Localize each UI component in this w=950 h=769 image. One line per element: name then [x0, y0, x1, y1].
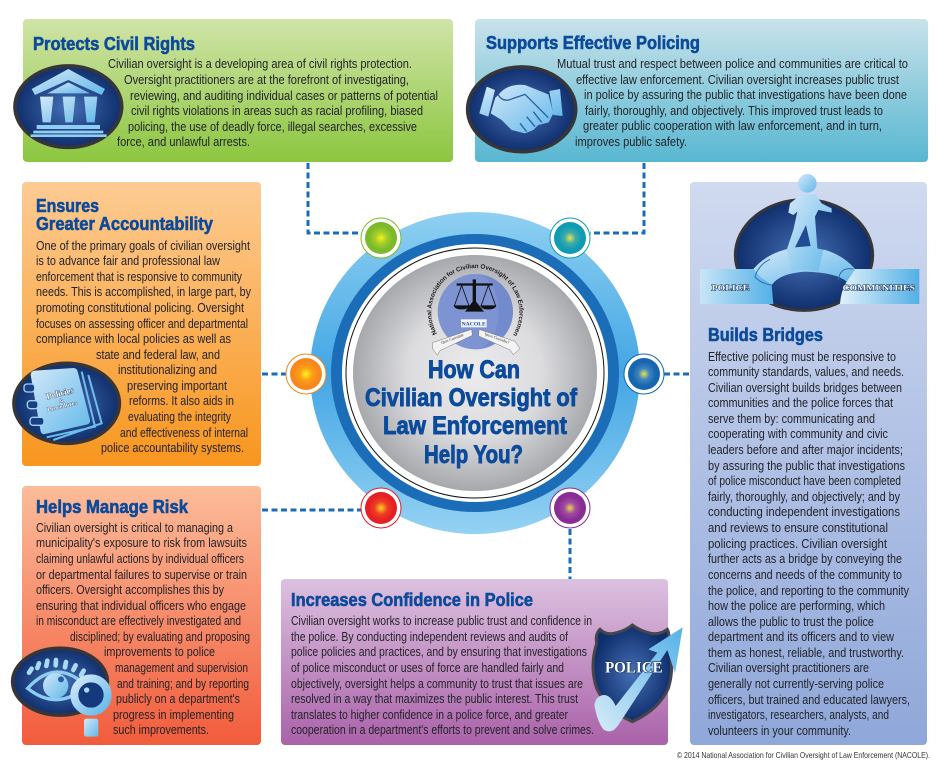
icon: policies and procedures notebook [14, 363, 119, 443]
heading: Increases Confidence in Police: Increases Confidence in Police [291, 589, 533, 610]
text block: accountability: enforcement that is responsive to community [36, 269, 242, 284]
text block: bridges: volunteers in your community. [708, 723, 851, 738]
heading: Supports Effective Policing: Supports Effective Policing [486, 32, 700, 53]
text block: accountability: evaluating the integrity [128, 409, 231, 424]
icon: policies and procedures notebook: & [59, 398, 65, 405]
icon: handshake [468, 67, 576, 152]
text block: effective policing: fairly, thoroughly, and objectively. This improved trust leads to [585, 103, 883, 118]
text block: manage risk: claiming unlawful actions by individual officers [36, 551, 244, 566]
text block: manage risk: disciplined; by evaluating and proposing [70, 629, 250, 644]
hub question text: Civilian Oversight of [365, 384, 578, 412]
connector: orange panel to hub [262, 372, 287, 376]
NACOLE logo: Ipsos Custodes? [484, 331, 510, 345]
panel: Ensures Greater Accountability [22, 182, 261, 466]
text block: confidence: translates to higher confidence in a police force, and greater [291, 707, 569, 722]
node: teal [550, 218, 590, 258]
text block: accountability: preserving important [127, 378, 227, 393]
node: orange [286, 354, 326, 394]
NACOLE logo [426, 264, 524, 356]
node: purple [550, 488, 590, 528]
text block: bridges: Civilian oversight builds bridges between [708, 380, 902, 395]
icon: person crossing puzzle bridge: COMMUNITIES [843, 283, 916, 292]
text block: civil rights: policing, the use of deadly force, illegal searches, excessive [128, 119, 417, 134]
panel: Helps Manage Risk [22, 486, 261, 745]
node: red [361, 488, 401, 528]
text block: bridges: investigators, researchers, analysts, and [708, 707, 889, 722]
text block: accountability: reforms. It also aids in [129, 393, 234, 408]
hub question text: Help You? [424, 441, 523, 469]
text block: bridges: of police misconduct have been completed [708, 473, 901, 488]
text block: accountability: focuses on assessing officer and departmental [36, 316, 248, 331]
text block: effective policing [557, 56, 908, 149]
text block: manage risk: management and supervision [115, 660, 248, 675]
connector: green panel to hub [308, 163, 362, 233]
panel: Increases Confidence in Police [281, 579, 668, 745]
connector: bridges panel to hub [664, 372, 690, 376]
text block: bridges: officers, but trained and educated lawyers, [708, 692, 910, 707]
icon: police shield and check mark [593, 625, 683, 731]
text block: confidence: objectively, oversight helps a community to trust that issues are [291, 676, 583, 691]
icon: policies and procedures notebook: Policies [45, 385, 75, 401]
panel: Supports Effective Policing [475, 19, 928, 162]
NACOLE logo: National Association for Civilian Oversight of Law Enforcement [426, 264, 524, 336]
hub question text: Law Enforcement [383, 412, 568, 440]
node: blue [624, 354, 664, 394]
hub question text: How Can [428, 356, 520, 384]
hub question text [365, 356, 578, 469]
text block: manage risk: municipality's exposure to risk from lawsuits [36, 535, 247, 550]
text block: civil rights: civil rights violations in areas such as racial profiling, biased [131, 103, 423, 118]
icon: police shield and check mark: POLICE [605, 659, 663, 676]
text block: confidence: police policies and practices, and by ensuring that investigations [291, 644, 587, 659]
text block: confidence: the police. By conducting independent reviews and audits of [291, 629, 568, 644]
text block: civil rights: force, and unlawful arrests. [117, 134, 250, 149]
text block: confidence: resolved in a way that maximizes the public interest. This trust [291, 691, 578, 706]
text block: manage risk: progress in implementing [113, 707, 234, 722]
text block: bridges: by assuring the public that investigations [708, 458, 905, 473]
text block: manage risk [36, 520, 250, 737]
heading: Builds Bridges: Builds Bridges [708, 324, 823, 345]
text block: civil rights [108, 56, 438, 149]
text block: bridges: department and its officers and to view [708, 629, 895, 644]
text block: confidence: Civilian oversight works to increase public trust and confidence in [291, 613, 592, 628]
text block: bridges: Effective policing must be responsive to [708, 349, 896, 364]
text block: bridges: further acts as a bridge by conveying the [708, 551, 902, 566]
text block: bridges: and reviews to ensure constitutional [708, 520, 888, 535]
text block: bridges: how the police are performing, which [708, 598, 885, 613]
panel: Protects Civil Rights [23, 19, 453, 162]
text block: manage risk: or departmental failures to supervise or train [36, 567, 247, 582]
text block: manage risk: and training; and by reporting [117, 676, 249, 691]
icon: eye and magnifying glass [13, 648, 108, 737]
text block: confidence: of police misconduct or uses of force are handled fairly and [291, 660, 564, 675]
text block: bridges: concerns and needs of the community to [708, 567, 902, 582]
text block: bridges: them as honest, reliable, and trustworthy. [708, 645, 904, 660]
NACOLE logo: NACOLE [462, 321, 486, 327]
text block: bridges: allows the public to trust the police [708, 614, 874, 629]
text block: confidence: cooperation in a department's efforts to prevent and solve crimes. [291, 722, 594, 737]
node: green [361, 218, 401, 258]
text block: accountability: police accountability systems. [101, 440, 244, 455]
heading: Ensures Greater Accountability: Ensures [36, 195, 99, 216]
text block: bridges [708, 349, 910, 738]
connector: red panel to hub [262, 508, 362, 512]
icon: policies and procedures notebook: Procedures [47, 399, 78, 414]
text block: manage risk: publicly on a department's [116, 691, 240, 706]
text block: manage risk: such improvements. [113, 722, 209, 737]
text block: effective policing: effective law enforcement. Civilian oversight increases public trust [576, 72, 899, 87]
text block: accountability: One of the primary goals of civilian oversight [36, 238, 250, 253]
text block: bridges: fairly, thoroughly, and objectively; and by [708, 489, 900, 504]
text block: civil rights: reviewing, and auditing individual cases or patterns of potential [130, 88, 438, 103]
heading: Ensures Greater Accountability [36, 195, 214, 234]
icon: person crossing puzzle bridge: POLICE [712, 283, 749, 292]
text block: manage risk: in misconduct are effectively investigated and [36, 613, 241, 628]
text block: bridges: generally not currently-serving police [708, 676, 884, 691]
heading: Helps Manage Risk: Helps Manage Risk [36, 496, 189, 517]
icon: person crossing puzzle bridge [700, 174, 919, 310]
NACOLE logo: Quis Custodiet [440, 332, 465, 345]
text block: accountability: is to advance fair and professional law [36, 253, 221, 268]
text block: manage risk: ensuring that individual officers who engage [36, 598, 246, 613]
text block: civil rights: Oversight practitioners are at the forefront of investigating, [124, 72, 409, 87]
text block: effective policing: improves public safety. [575, 134, 687, 149]
text block: confidence [291, 613, 594, 737]
text block: bridges: leaders before and after major incidents; [708, 442, 903, 457]
text block: bridges: policing practices. Civilian oversight [708, 536, 887, 551]
text block: accountability: promoting constitutional policing. Oversight [36, 300, 244, 315]
text block: manage risk: improvements to police [104, 644, 215, 659]
text block: bridges: communities and the police forces that [708, 395, 893, 410]
text block: accountability: compliance with local policies as well as [36, 331, 231, 346]
text block: civil rights: Civilian oversight is a developing area of civil rights protection. [108, 56, 412, 71]
text block: bridges: serve them by: communicating and [708, 411, 875, 426]
connector: purple panel to hub [568, 529, 572, 579]
text block: manage risk: officers. Oversight accomplishes this by [36, 582, 224, 597]
text block: effective policing: greater public cooperation with law enforcement, and in turn, [583, 118, 882, 133]
text block: bridges: cooperating with community and civic [708, 426, 888, 441]
heading: Protects Civil Rights: Protects Civil Rights [33, 33, 195, 54]
heading: Ensures Greater Accountability: Greater Accountability [36, 213, 214, 234]
text block: bridges: community standards, values, and needs. [708, 364, 904, 379]
central hub circle [311, 212, 639, 534]
text block: bridges: Civilian oversight practitioners are [708, 660, 869, 675]
icon: courthouse [15, 66, 122, 147]
panel: Builds Bridges [690, 182, 927, 745]
text block: bridges: the police, and reporting to the community [708, 583, 909, 598]
text block: accountability: institutionalizing and [118, 362, 217, 377]
text block: accountability: and effectiveness of internal [120, 425, 248, 440]
text block: accountability [36, 238, 251, 455]
text block: accountability: needs. This is accomplished, in large part, by [36, 284, 251, 299]
text block: manage risk: Civilian oversight is critical to managing a [36, 520, 234, 535]
connector: blue panel to hub [590, 163, 644, 233]
text block: bridges: conducting independent investigations [708, 504, 900, 519]
text block: accountability: state and federal law, and [96, 347, 220, 362]
